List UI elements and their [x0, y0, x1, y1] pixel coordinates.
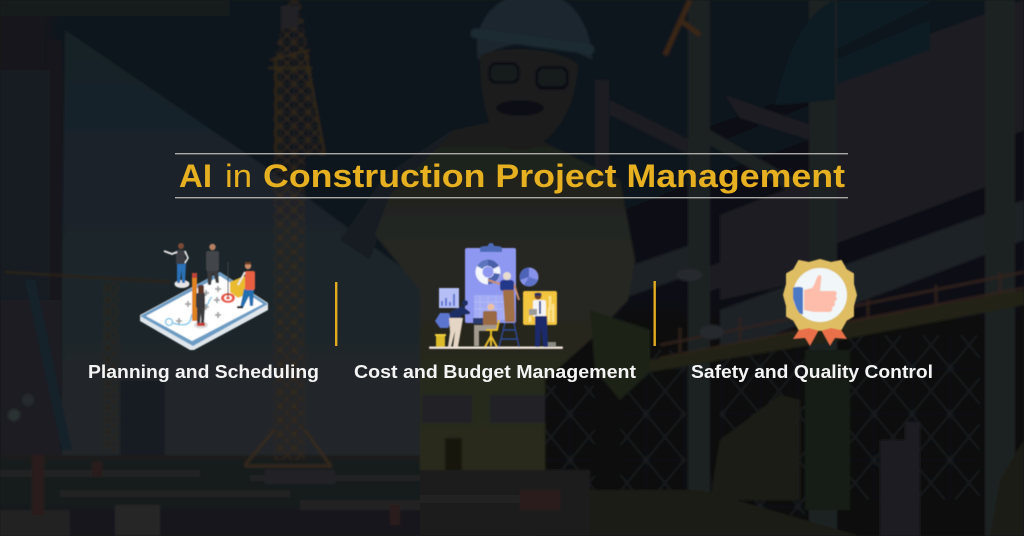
label: Cost and Budget Management: Cost and Budget Management	[354, 362, 636, 382]
icon: quality badge with thumbs up	[784, 260, 856, 346]
icon: planning tablet with people	[140, 243, 268, 350]
divider: right	[654, 281, 656, 346]
person: woman on ladder	[488, 272, 519, 322]
title text: AI	[179, 158, 212, 194]
thumb	[804, 275, 837, 312]
route line and markers	[166, 286, 221, 326]
title text: Construction Project Management	[263, 158, 845, 194]
box	[230, 276, 252, 298]
person: woman with pencil	[194, 285, 208, 328]
pencil	[192, 273, 197, 321]
person: man in orange	[237, 262, 255, 308]
person: pointing man	[164, 243, 190, 288]
label: Safety and Quality Control: Safety and Quality Control	[691, 362, 933, 382]
title top rule	[175, 153, 848, 154]
right yellow ghost	[590, 310, 650, 400]
divider: left	[335, 282, 337, 346]
red railing	[660, 272, 1024, 358]
icon: budget team with clipboard	[429, 243, 563, 349]
person: suited man	[206, 244, 219, 285]
person: seated man	[473, 304, 497, 346]
worker ghost helmet, face and vest	[340, 128, 455, 260]
label: Planning and Scheduling: Planning and Scheduling	[88, 362, 319, 382]
chair	[485, 320, 499, 347]
ladder	[499, 323, 519, 347]
bar chart card	[439, 288, 459, 308]
ribbons	[793, 325, 847, 346]
rosette	[784, 260, 856, 330]
ground	[0, 455, 420, 536]
scaffolding	[840, 335, 980, 500]
title block	[175, 153, 848, 198]
yellow chart card	[523, 291, 557, 325]
pie chart	[520, 268, 538, 286]
donut chart	[476, 259, 500, 284]
blue cuff	[793, 287, 803, 314]
tablet body	[140, 272, 268, 350]
cranes	[274, 0, 324, 460]
target	[221, 262, 235, 303]
person: man with tablet	[529, 292, 548, 347]
ground line	[429, 346, 563, 349]
title text: in	[225, 158, 252, 194]
clipboard	[465, 243, 516, 323]
person: leaning man	[448, 300, 470, 347]
hexagon and bin	[435, 313, 556, 347]
right building	[420, 0, 1024, 536]
title bottom rule	[175, 197, 848, 198]
white disc	[793, 268, 847, 322]
